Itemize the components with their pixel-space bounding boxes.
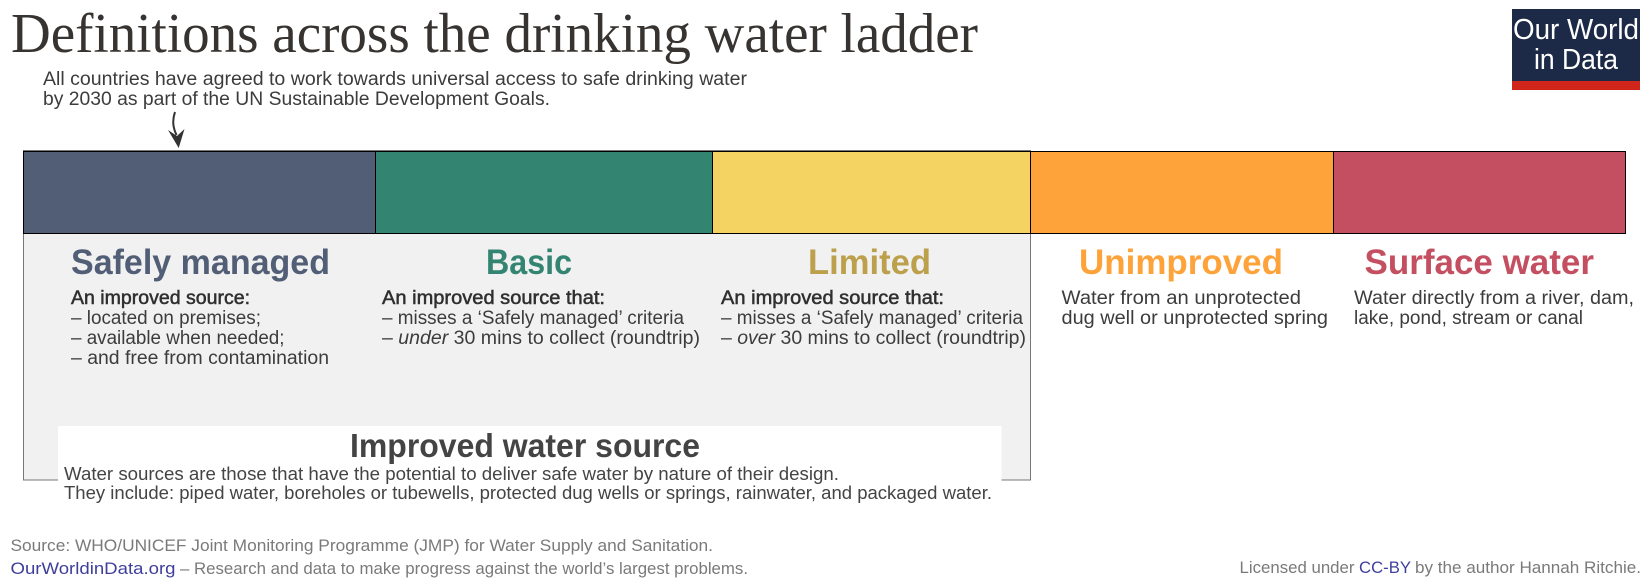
definition: safely managed: – available when needed; [71,328,284,349]
column: limited [721,243,1026,349]
intro text: All countries have agreed to work towards universal access to safe drinking water [43,69,748,90]
heading: limited: Limited [808,243,931,282]
heading: safely managed: Safely managed [71,243,330,282]
column: surface water [1354,243,1634,329]
heading: unimproved: Unimproved [1079,243,1283,282]
footer: site line: – Research and data to make progress against the world’s largest problems. [180,559,748,578]
definition: limited [721,288,1026,349]
description: improved water source: They include: piped water, boreholes or tubewells, protected dug wells or springs, rainwater, and packaged water. [64,483,992,503]
definition: basic: An improved source that: [382,288,605,309]
column: safely managed [71,243,330,369]
panel: improved water sources background [24,150,1030,480]
logo: Our World in Data: in Data [1534,44,1619,76]
definition: surface water: lake, pond, stream or canal [1354,308,1583,329]
callout: improved water source [58,426,1002,503]
definition: limited: – over 30 mins to collect (roundtrip) [721,328,1026,349]
logo: Our World in Data: Our World [1513,14,1639,46]
definition: unimproved [1062,288,1328,329]
footer: site line: OurWorldinData.org [10,559,176,578]
source note: Source: WHO/UNICEF Joint Monitoring Programme (JMP) for Water Supply and Sanitation. [10,536,713,555]
segment: surface water [1334,152,1626,234]
definition: basic: – misses a ‘Safely managed’ criteria [382,308,684,329]
segment: unimproved [1030,152,1334,234]
segment: safely managed [24,152,376,234]
column: basic [382,243,700,349]
heading: surface water: Surface water [1364,243,1594,282]
title: Definitions across the drinking water ladder [11,3,978,65]
footer: license: Licensed under [1240,558,1355,577]
heading: basic: Basic [486,243,572,282]
segment: limited [712,152,1030,234]
arrow to safely managed [168,112,184,148]
segment: basic [376,152,712,234]
definition: basic: – under 30 mins to collect (roundtrip) [382,328,700,349]
definition: safely managed [71,288,329,369]
footer: license: CC-BY [1359,558,1411,577]
heading: improved water source: Improved water source [350,427,700,464]
intro text [43,69,748,110]
intro text: by 2030 as part of the UN Sustainable Development Goals. [43,89,550,110]
ladder bar [24,152,1626,234]
description: improved water source: Water sources are those that have the potential to deliver safe water by nature of their design. [64,464,839,484]
definition: safely managed: – and free from contamination [71,348,329,369]
definition: safely managed: – located on premises; [71,308,261,329]
definition: surface water: Water directly from a river, dam, [1354,288,1634,309]
footer: license [1240,558,1641,577]
column: unimproved [1062,243,1328,329]
definition: unimproved: dug well or unprotected spring [1062,308,1328,329]
definition: surface water [1354,288,1634,329]
definition: limited: An improved source that: [721,288,944,309]
definition: unimproved: Water from an unprotected [1062,288,1301,309]
definition: safely managed: An improved source: [71,288,250,309]
definition: basic [382,288,700,349]
definition: limited: – misses a ‘Safely managed’ criteria [721,308,1023,329]
logo: Our World in Data [1512,9,1640,90]
description: improved water source [64,464,992,503]
footer: license: by the author Hannah Ritchie. [1415,558,1641,577]
